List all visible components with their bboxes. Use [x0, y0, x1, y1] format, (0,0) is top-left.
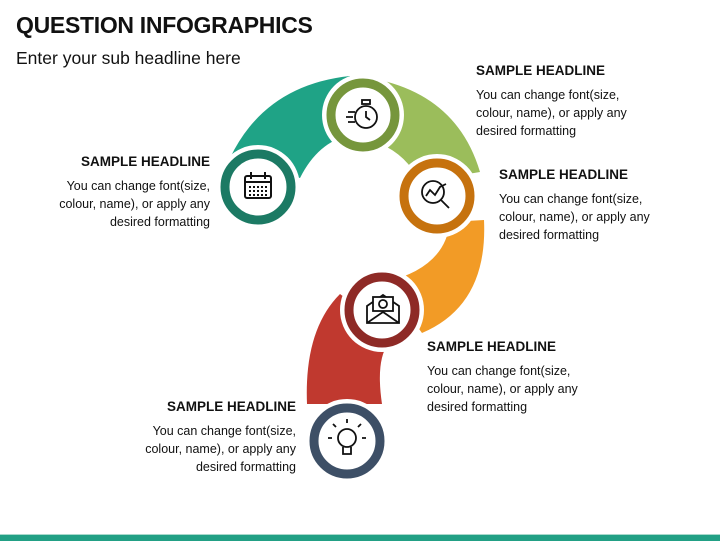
circle: stopwatch	[322, 74, 404, 156]
text: lower right block: SAMPLE HEADLINE	[427, 339, 556, 354]
icon: envelope	[367, 295, 399, 323]
circle: bulb	[305, 399, 389, 483]
text: middle right block	[499, 167, 650, 242]
text: top right block: SAMPLE HEADLINE	[476, 63, 605, 78]
title: QUESTION INFOGRAPHICS	[16, 12, 313, 38]
icon: calendar	[245, 172, 271, 198]
circle: calendar	[216, 145, 300, 229]
segment: green	[375, 80, 480, 182]
text: top right block	[476, 63, 627, 138]
text: bottom left block: You can change font(size, colour, name), or apply any desired formatting	[145, 424, 296, 474]
text: left headline block: SAMPLE HEADLINE	[81, 154, 210, 169]
text: left headline block	[59, 154, 210, 229]
text: bottom left block	[145, 399, 296, 474]
text: middle right block: SAMPLE HEADLINE	[499, 167, 628, 182]
segment: red	[307, 294, 396, 404]
text: left headline block: You can change font(size, colour, name), or apply any desired formatting	[59, 179, 210, 229]
text: top right block: You can change font(size, colour, name), or apply any desired formatting	[476, 88, 627, 138]
text: lower right block: You can change font(size, colour, name), or apply any desired formatting	[427, 364, 578, 414]
circle: email	[340, 268, 424, 352]
icon: light bulb	[328, 419, 366, 454]
text: bottom left block: SAMPLE HEADLINE	[167, 399, 296, 414]
text: middle right block: You can change font(size, colour, name), or apply any desired formatting	[499, 192, 650, 242]
icon: stopwatch	[346, 100, 377, 128]
bottom bar	[0, 534, 720, 541]
icon: magnifier chart	[422, 181, 449, 208]
circle: analytics	[395, 154, 479, 238]
segment: teal	[230, 76, 350, 178]
text: lower right block	[427, 339, 578, 414]
segment: orange	[385, 220, 484, 333]
subtitle: Enter your sub headline here	[16, 48, 241, 68]
